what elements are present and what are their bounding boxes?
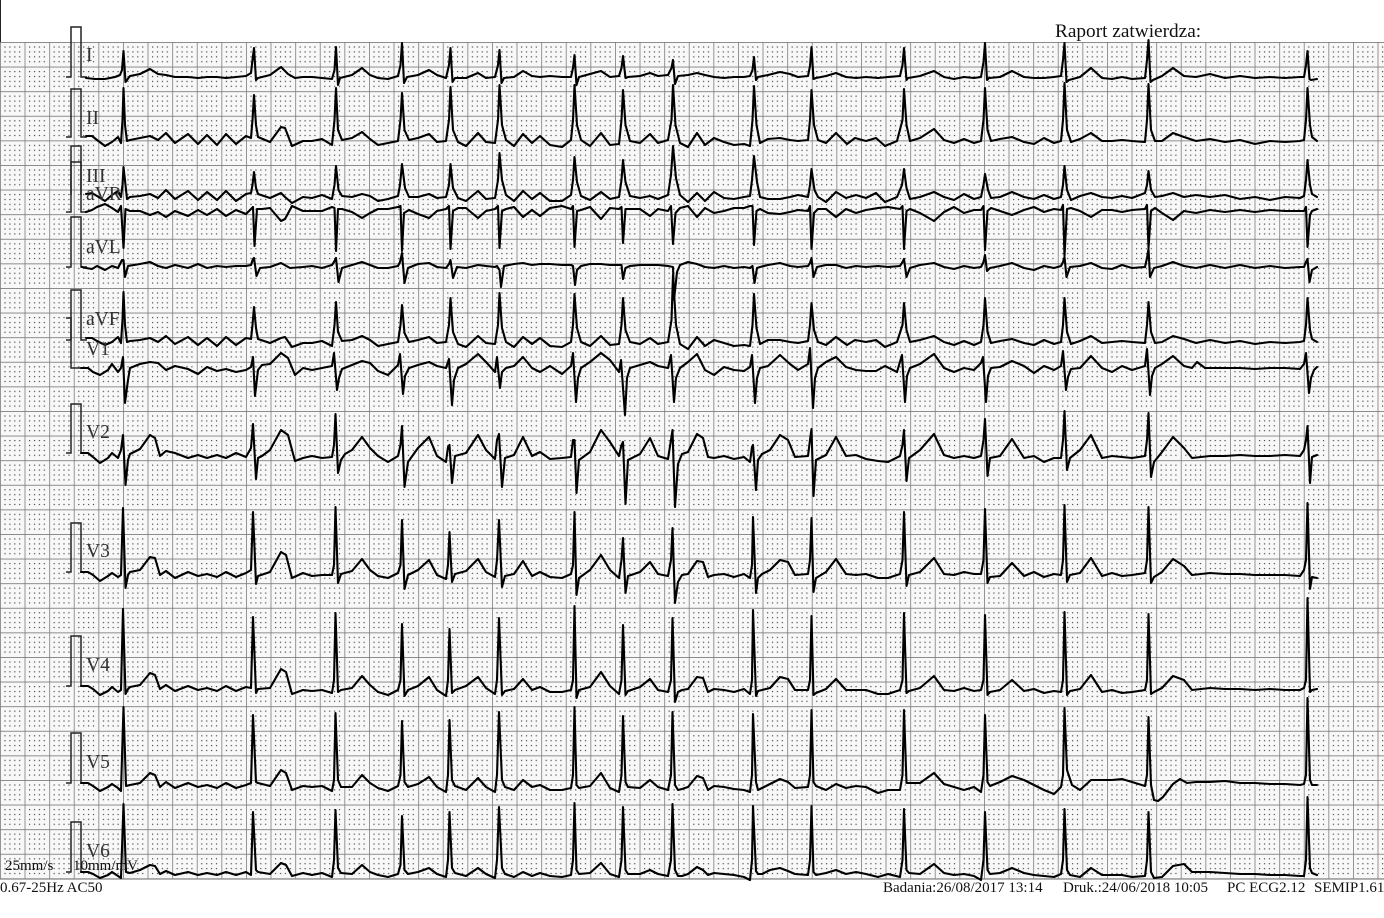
calibration pulse V2	[66, 404, 87, 453]
label V1: V1	[86, 339, 110, 360]
calibration pulse V3	[66, 523, 87, 572]
trace V1	[81, 348, 1317, 415]
trace III	[86, 146, 1317, 203]
software version: PC ECG2.12	[1227, 880, 1305, 896]
label aVR: aVR	[86, 184, 122, 205]
trace aVR	[86, 204, 1317, 256]
lead V3	[66, 503, 1317, 603]
trace aVF	[86, 275, 1317, 349]
lead V4	[66, 598, 1317, 702]
label V4: V4	[86, 655, 110, 676]
recording date: Badania:26/08/2017 13:14	[883, 880, 1043, 896]
lead II	[66, 83, 1317, 147]
gain setting: 10mm/mV	[73, 858, 138, 874]
calibration pulse V6	[66, 822, 87, 872]
calibration pulse III	[71, 146, 81, 195]
calibration pulse aVR	[66, 162, 87, 212]
device version: SEMIP1.61	[1314, 880, 1384, 896]
calibration pulse I	[66, 27, 87, 77]
trace V5	[81, 698, 1317, 801]
lead V1	[66, 318, 1317, 415]
approval heading: Raport zatwierdza:	[1055, 21, 1201, 42]
trace II	[86, 83, 1317, 147]
lead V5	[66, 698, 1317, 801]
calibration pulse V4	[66, 636, 87, 686]
lead V2	[66, 404, 1317, 507]
lead V6	[66, 797, 1317, 880]
lead III	[71, 146, 1317, 203]
label III: III	[86, 166, 105, 187]
label V6: V6	[86, 841, 110, 862]
calibration pulse V5	[66, 733, 87, 783]
label I: I	[86, 45, 92, 66]
lead aVL	[66, 217, 1317, 300]
trace V3	[81, 503, 1317, 603]
trace V6	[81, 797, 1317, 880]
label V3: V3	[86, 541, 110, 562]
lead aVF	[66, 275, 1317, 349]
lead aVR	[66, 162, 1317, 256]
calibration pulse II	[66, 89, 87, 137]
trace aVL	[82, 249, 1317, 300]
trace V4	[81, 598, 1317, 702]
calibration pulse aVL	[66, 217, 87, 267]
trace V2	[81, 411, 1317, 507]
label V2: V2	[86, 422, 110, 443]
lead I	[66, 27, 1317, 85]
print date: Druk.:24/06/2018 10:05	[1063, 880, 1208, 896]
filter info: 0.67-25Hz AC50	[0, 880, 102, 896]
label V5: V5	[86, 752, 110, 773]
label II: II	[86, 108, 99, 129]
calibration pulse V1	[66, 318, 87, 368]
calibration pulse aVF	[66, 290, 87, 340]
label aVL: aVL	[86, 237, 121, 258]
label aVF: aVF	[86, 309, 120, 330]
trace I	[86, 40, 1317, 85]
paper speed setting: 25mm/s	[5, 858, 54, 874]
